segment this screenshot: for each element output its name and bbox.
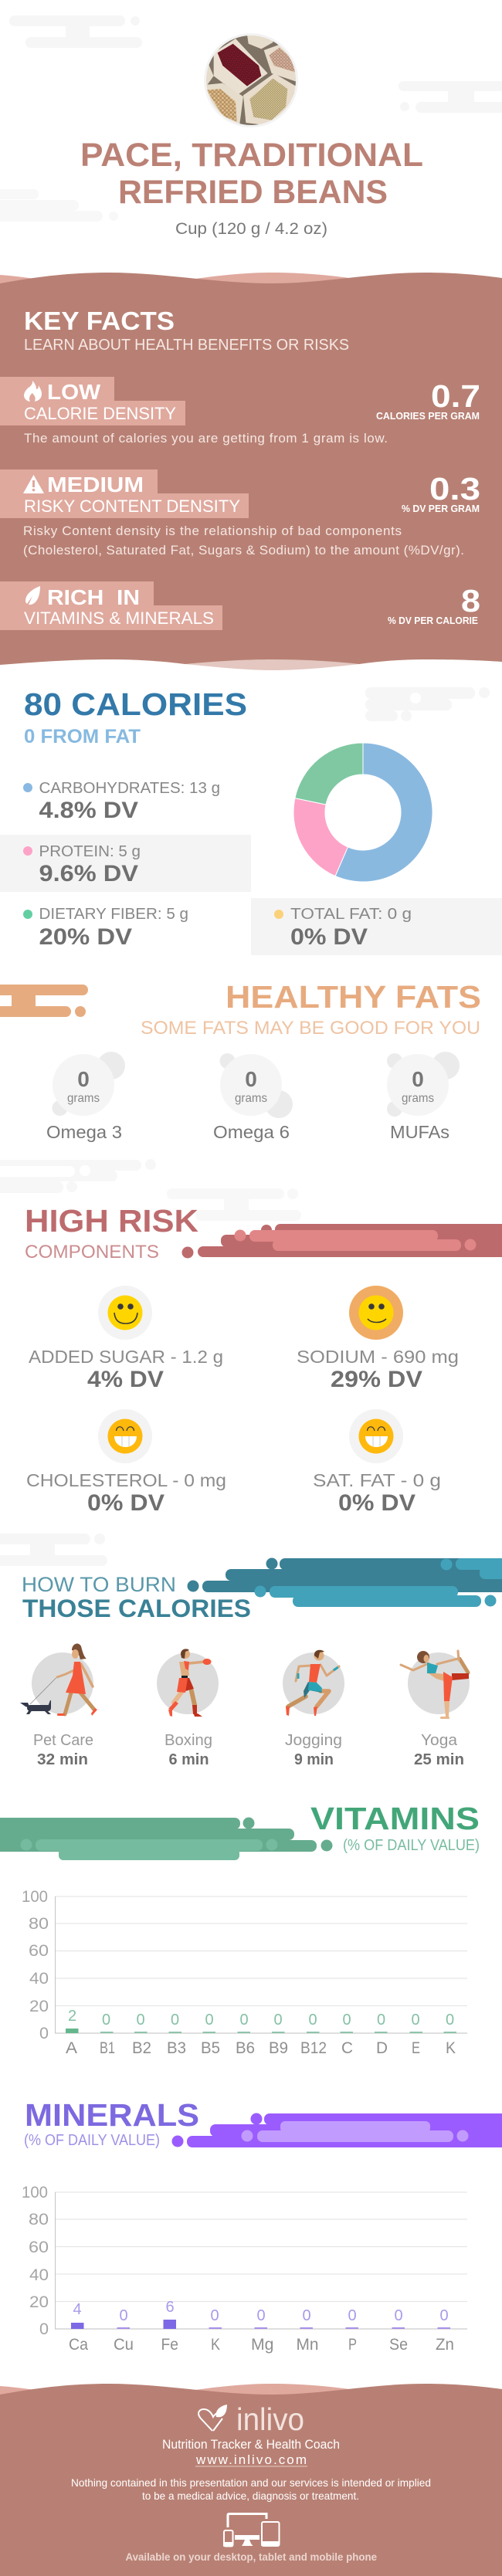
icon: leaf bbox=[25, 586, 40, 605]
risk item: saturated fat bbox=[313, 1409, 441, 1516]
legend: dietary fiber: 20% DV bbox=[39, 924, 132, 950]
fact: low calorie density: CALORIES PER GRAM bbox=[376, 411, 480, 422]
fact: low calorie density: The amount of calories you are getting from 1 gram is low. bbox=[24, 431, 388, 446]
fact: medium risky content density: RISKY CONTENT DENSITY bbox=[24, 497, 240, 516]
bar chart: minerals: 100 bbox=[22, 2184, 48, 2201]
bar chart: vitamins: 0 bbox=[377, 2012, 385, 2029]
bar chart: vitamins: A bbox=[66, 2039, 77, 2057]
bar chart: minerals: Cu bbox=[114, 2336, 134, 2354]
risk item: cholesterol bbox=[26, 1409, 226, 1516]
legend: carbohydrates: 4.8% DV bbox=[39, 798, 138, 823]
subheading: percent of daily value: (% OF DAILY VALUE) bbox=[343, 1837, 480, 1854]
bar chart: vitamins: E bbox=[412, 2039, 420, 2057]
donut chart bbox=[293, 743, 432, 882]
background cloud: calories bbox=[365, 687, 490, 721]
tagline: Nutrition Tracker & Health Coach bbox=[162, 2437, 340, 2452]
legend: total fat: 0% DV bbox=[290, 924, 368, 950]
stat: omega 3: grams bbox=[67, 1092, 100, 1105]
fact: low calorie density: LOW bbox=[47, 380, 101, 404]
legend: total fat: TOTAL FAT: 0 g bbox=[290, 906, 412, 923]
activity labels bbox=[33, 1732, 464, 1768]
panel: minerals bbox=[22, 2097, 502, 2354]
stat: omega 6 bbox=[213, 1053, 293, 1142]
logo: inlivo bbox=[198, 2401, 304, 2437]
disclaimer: Nothing contained in this presentation and our services is intended or implied bbox=[71, 2476, 431, 2489]
icon: warning triangle bbox=[23, 475, 44, 493]
fact: medium risky content density: 0.3 bbox=[429, 471, 480, 507]
bar chart: minerals: 80 bbox=[29, 2211, 49, 2229]
bar chart: vitamins: 0 bbox=[273, 2012, 283, 2029]
heading: those calories: THOSE CALORIES bbox=[22, 1595, 251, 1622]
panel: healthy fats bbox=[0, 979, 481, 1142]
bar chart: vitamins: 100 bbox=[22, 1888, 48, 1906]
bar chart: vitamins: 0 bbox=[102, 2012, 110, 2029]
bar chart: minerals: Mn bbox=[297, 2336, 318, 2354]
risk item: added sugar: 4% DV bbox=[87, 1367, 164, 1392]
subheading: SOME FATS MAY BE GOOD FOR YOU bbox=[141, 1018, 480, 1039]
footer bbox=[0, 2384, 502, 2576]
risk item: sodium bbox=[297, 1286, 459, 1392]
fact: medium risky content density: % DV PER GRAM bbox=[402, 503, 480, 514]
legend: total fat bbox=[274, 906, 412, 950]
activity labels: Boxing bbox=[165, 1732, 212, 1749]
activity labels: 6 min bbox=[168, 1751, 209, 1768]
fact: rich in vitamins and minerals bbox=[0, 581, 480, 630]
stat: omega 6: Omega 6 bbox=[213, 1122, 290, 1142]
activity labels: 25 min bbox=[414, 1751, 464, 1768]
decorative bars: healthy fats bbox=[0, 985, 88, 1017]
stat: omega 6: 0 bbox=[245, 1067, 257, 1091]
bar chart: vitamins: 0 bbox=[342, 2012, 351, 2029]
disclaimer: to be a medical advice, diagnosis or treatment. bbox=[142, 2490, 359, 2502]
risk item: added sugar: ADDED SUGAR - 1.2 g bbox=[29, 1347, 223, 1367]
icon: flame bbox=[24, 381, 42, 402]
activity labels: Pet Care bbox=[33, 1732, 93, 1749]
title bbox=[80, 137, 423, 211]
bar chart: minerals bbox=[22, 2184, 467, 2354]
risk item: saturated fat: SAT. FAT - 0 g bbox=[313, 1470, 441, 1490]
bar chart: minerals: 60 bbox=[29, 2239, 49, 2256]
bar chart: vitamins: 2 bbox=[68, 2008, 76, 2025]
fact: rich in vitamins and minerals: VITAMINS & MINERALS bbox=[24, 608, 214, 628]
decorative bars: vitamins bbox=[0, 1818, 332, 1860]
bar chart: minerals: 0 bbox=[119, 2307, 128, 2324]
bar chart: vitamins: B5 bbox=[201, 2039, 220, 2057]
bar chart: vitamins: 0 bbox=[446, 2012, 454, 2029]
fact: rich in vitamins and minerals: RICH IN bbox=[47, 585, 140, 609]
bar chart: minerals: 4 bbox=[73, 2301, 82, 2318]
bar chart: vitamins: D bbox=[376, 2039, 388, 2057]
title: PACE, TRADITIONAL bbox=[80, 137, 423, 174]
bar chart: vitamins: 0 bbox=[205, 2012, 214, 2029]
stat: mufas bbox=[387, 1052, 460, 1142]
risk item: cholesterol: 0% DV bbox=[87, 1490, 165, 1516]
stat: omega 3: Omega 3 bbox=[46, 1122, 122, 1142]
risk item: saturated fat: 0% DV bbox=[338, 1490, 416, 1516]
bar chart: minerals: 0 bbox=[394, 2307, 403, 2324]
activity: yoga bbox=[401, 1651, 470, 1719]
stat: omega 3 bbox=[46, 1052, 125, 1142]
bar chart: minerals: Se bbox=[389, 2336, 408, 2354]
stat: omega 3: 0 bbox=[77, 1067, 90, 1091]
panel: high risk components bbox=[25, 1203, 502, 1516]
activity labels: 9 min bbox=[294, 1751, 334, 1768]
bar chart: vitamins: 0 bbox=[39, 2025, 49, 2042]
bar chart: vitamins: 0 bbox=[308, 2012, 317, 2029]
bar chart: vitamins: 60 bbox=[29, 1942, 49, 1960]
fact: rich in vitamins and minerals: 8 bbox=[461, 583, 480, 619]
bar chart: vitamins: B1 bbox=[100, 2039, 115, 2057]
bar chart: minerals: Fe bbox=[161, 2336, 178, 2354]
legend: protein bbox=[23, 843, 141, 886]
title: REFRIED BEANS bbox=[118, 174, 388, 211]
bar chart: minerals: 0 bbox=[256, 2307, 266, 2324]
heading: vitamins: VITAMINS bbox=[310, 1801, 480, 1836]
bar chart: minerals: 0 bbox=[302, 2307, 311, 2324]
decorative bars: minerals bbox=[171, 2113, 502, 2147]
bar chart: vitamins: C bbox=[341, 2039, 353, 2057]
decorative bars: burn bbox=[187, 1558, 502, 1607]
legend: dietary fiber bbox=[23, 906, 188, 950]
stat: mufas: MUFAs bbox=[390, 1122, 449, 1142]
decorative bars: high risk bbox=[182, 1224, 502, 1259]
background cloud: top right bbox=[399, 81, 502, 113]
activity: boxing bbox=[157, 1649, 219, 1717]
subheading: percent of daily value: (% OF DAILY VALUE) bbox=[24, 2132, 160, 2149]
risk item: sodium: 29% DV bbox=[331, 1367, 422, 1392]
risk item: cholesterol: CHOLESTEROL - 0 mg bbox=[26, 1470, 226, 1490]
bar chart: vitamins: K bbox=[446, 2039, 456, 2057]
bar chart: minerals: 40 bbox=[29, 2266, 49, 2284]
activity labels: Yoga bbox=[421, 1732, 458, 1749]
bar chart: vitamins: 0 bbox=[411, 2012, 420, 2029]
bar chart: minerals: 0 bbox=[39, 2320, 49, 2338]
heading: key facts: KEY FACTS bbox=[24, 307, 175, 335]
fact: rich in vitamins and minerals: % DV PER CALORIE bbox=[388, 615, 478, 626]
subheading: LEARN ABOUT HEALTH BENEFITS OR RISKS bbox=[24, 337, 349, 354]
activity: jogging bbox=[283, 1650, 344, 1716]
background cloud: left of title bbox=[0, 189, 118, 222]
panel: how to burn those calories bbox=[20, 1558, 502, 1768]
fact: medium risky content density: MEDIUM bbox=[47, 473, 144, 497]
bar chart: vitamins: 20 bbox=[29, 1998, 49, 2015]
heading: high risk: HIGH RISK bbox=[25, 1203, 198, 1239]
heading: calories: 80 CALORIES bbox=[24, 686, 247, 722]
icon: devices bbox=[223, 2514, 280, 2547]
availability note: Available on your desktop, tablet and mobile phone bbox=[125, 2551, 377, 2563]
stat: mufas: 0 bbox=[412, 1067, 424, 1091]
stat: mufas: grams bbox=[402, 1092, 434, 1105]
background cloud: high risk left bbox=[0, 1159, 156, 1193]
serving size: Cup (120 g / 4.2 oz) bbox=[175, 220, 327, 238]
bar chart: minerals: 0 bbox=[210, 2307, 219, 2324]
risk item: sodium: SODIUM - 690 mg bbox=[297, 1347, 459, 1367]
legend: dietary fiber: DIETARY FIBER: 5 g bbox=[39, 906, 188, 923]
subheading: components: COMPONENTS bbox=[25, 1242, 159, 1263]
heading: how to burn: HOW TO BURN bbox=[22, 1573, 176, 1596]
bar chart: minerals: P bbox=[348, 2336, 357, 2354]
bar chart: minerals: 0 bbox=[348, 2307, 357, 2324]
background cloud: top left bbox=[9, 15, 142, 48]
bar chart: vitamins: B3 bbox=[167, 2039, 186, 2057]
bar chart: vitamins: 40 bbox=[29, 1970, 49, 1988]
fact: medium risky content density bbox=[0, 469, 480, 558]
bar chart: minerals: 6 bbox=[165, 2299, 175, 2316]
activity: pet care bbox=[20, 1644, 97, 1716]
stat: omega 6: grams bbox=[235, 1092, 267, 1105]
bar chart: minerals: 20 bbox=[29, 2293, 49, 2311]
legend: carbohydrates bbox=[23, 780, 220, 823]
website link: www.inlivo.com bbox=[195, 2452, 307, 2467]
bar chart: vitamins bbox=[22, 1888, 467, 2057]
food photo: beans in sacks bbox=[204, 33, 298, 127]
background cloud: burn bbox=[0, 1534, 107, 1566]
activity labels: Jogging bbox=[285, 1732, 342, 1749]
bar chart: minerals: 0 bbox=[439, 2307, 449, 2324]
bar chart: minerals: Zn bbox=[436, 2336, 454, 2354]
highlight rows bbox=[0, 835, 502, 955]
bar chart: minerals: Mg bbox=[251, 2336, 273, 2354]
bar chart: vitamins: 0 bbox=[239, 2012, 249, 2029]
fact: medium risky content density: Risky Content density is the relationship of bad components bbox=[23, 524, 402, 538]
heading: minerals: MINERALS bbox=[25, 2097, 199, 2133]
bar chart: minerals: K bbox=[211, 2336, 220, 2354]
disclaimer bbox=[71, 2476, 431, 2502]
background cloud: high risk middle bbox=[167, 1188, 301, 1221]
fact: low calorie density: 0.7 bbox=[431, 378, 480, 414]
fact: medium risky content density: (Cholesterol, Saturated Fat, Sugars & Sodium) to the amount (%DV/gr). bbox=[23, 543, 464, 558]
panel: calories bbox=[0, 686, 502, 955]
bar chart: vitamins: B6 bbox=[236, 2039, 255, 2057]
panel: key facts bbox=[0, 273, 502, 680]
fact: low calorie density bbox=[0, 377, 480, 446]
bar chart: minerals: Ca bbox=[69, 2336, 88, 2354]
bar chart: vitamins: 0 bbox=[171, 2012, 179, 2029]
bar chart: vitamins: 0 bbox=[136, 2012, 145, 2029]
fact: low calorie density: CALORIE DENSITY bbox=[24, 404, 176, 423]
subheading: from fat: 0 FROM FAT bbox=[24, 726, 141, 747]
logo: inlivo: inlivo bbox=[236, 2401, 304, 2437]
legend: carbohydrates: CARBOHYDRATES: 13 g bbox=[39, 780, 220, 797]
panel: vitamins bbox=[0, 1801, 480, 2057]
bar chart: vitamins: B12 bbox=[300, 2039, 327, 2057]
risk item: added sugar bbox=[29, 1286, 223, 1392]
bar chart: vitamins: 80 bbox=[29, 1915, 49, 1933]
activity labels: 32 min bbox=[37, 1751, 88, 1768]
legend: protein: PROTEIN: 5 g bbox=[39, 843, 141, 860]
bar chart: vitamins: B2 bbox=[132, 2039, 151, 2057]
legend: protein: 9.6% DV bbox=[39, 861, 138, 886]
heading: healthy fats: HEALTHY FATS bbox=[226, 979, 481, 1015]
bar chart: vitamins: B9 bbox=[269, 2039, 288, 2057]
